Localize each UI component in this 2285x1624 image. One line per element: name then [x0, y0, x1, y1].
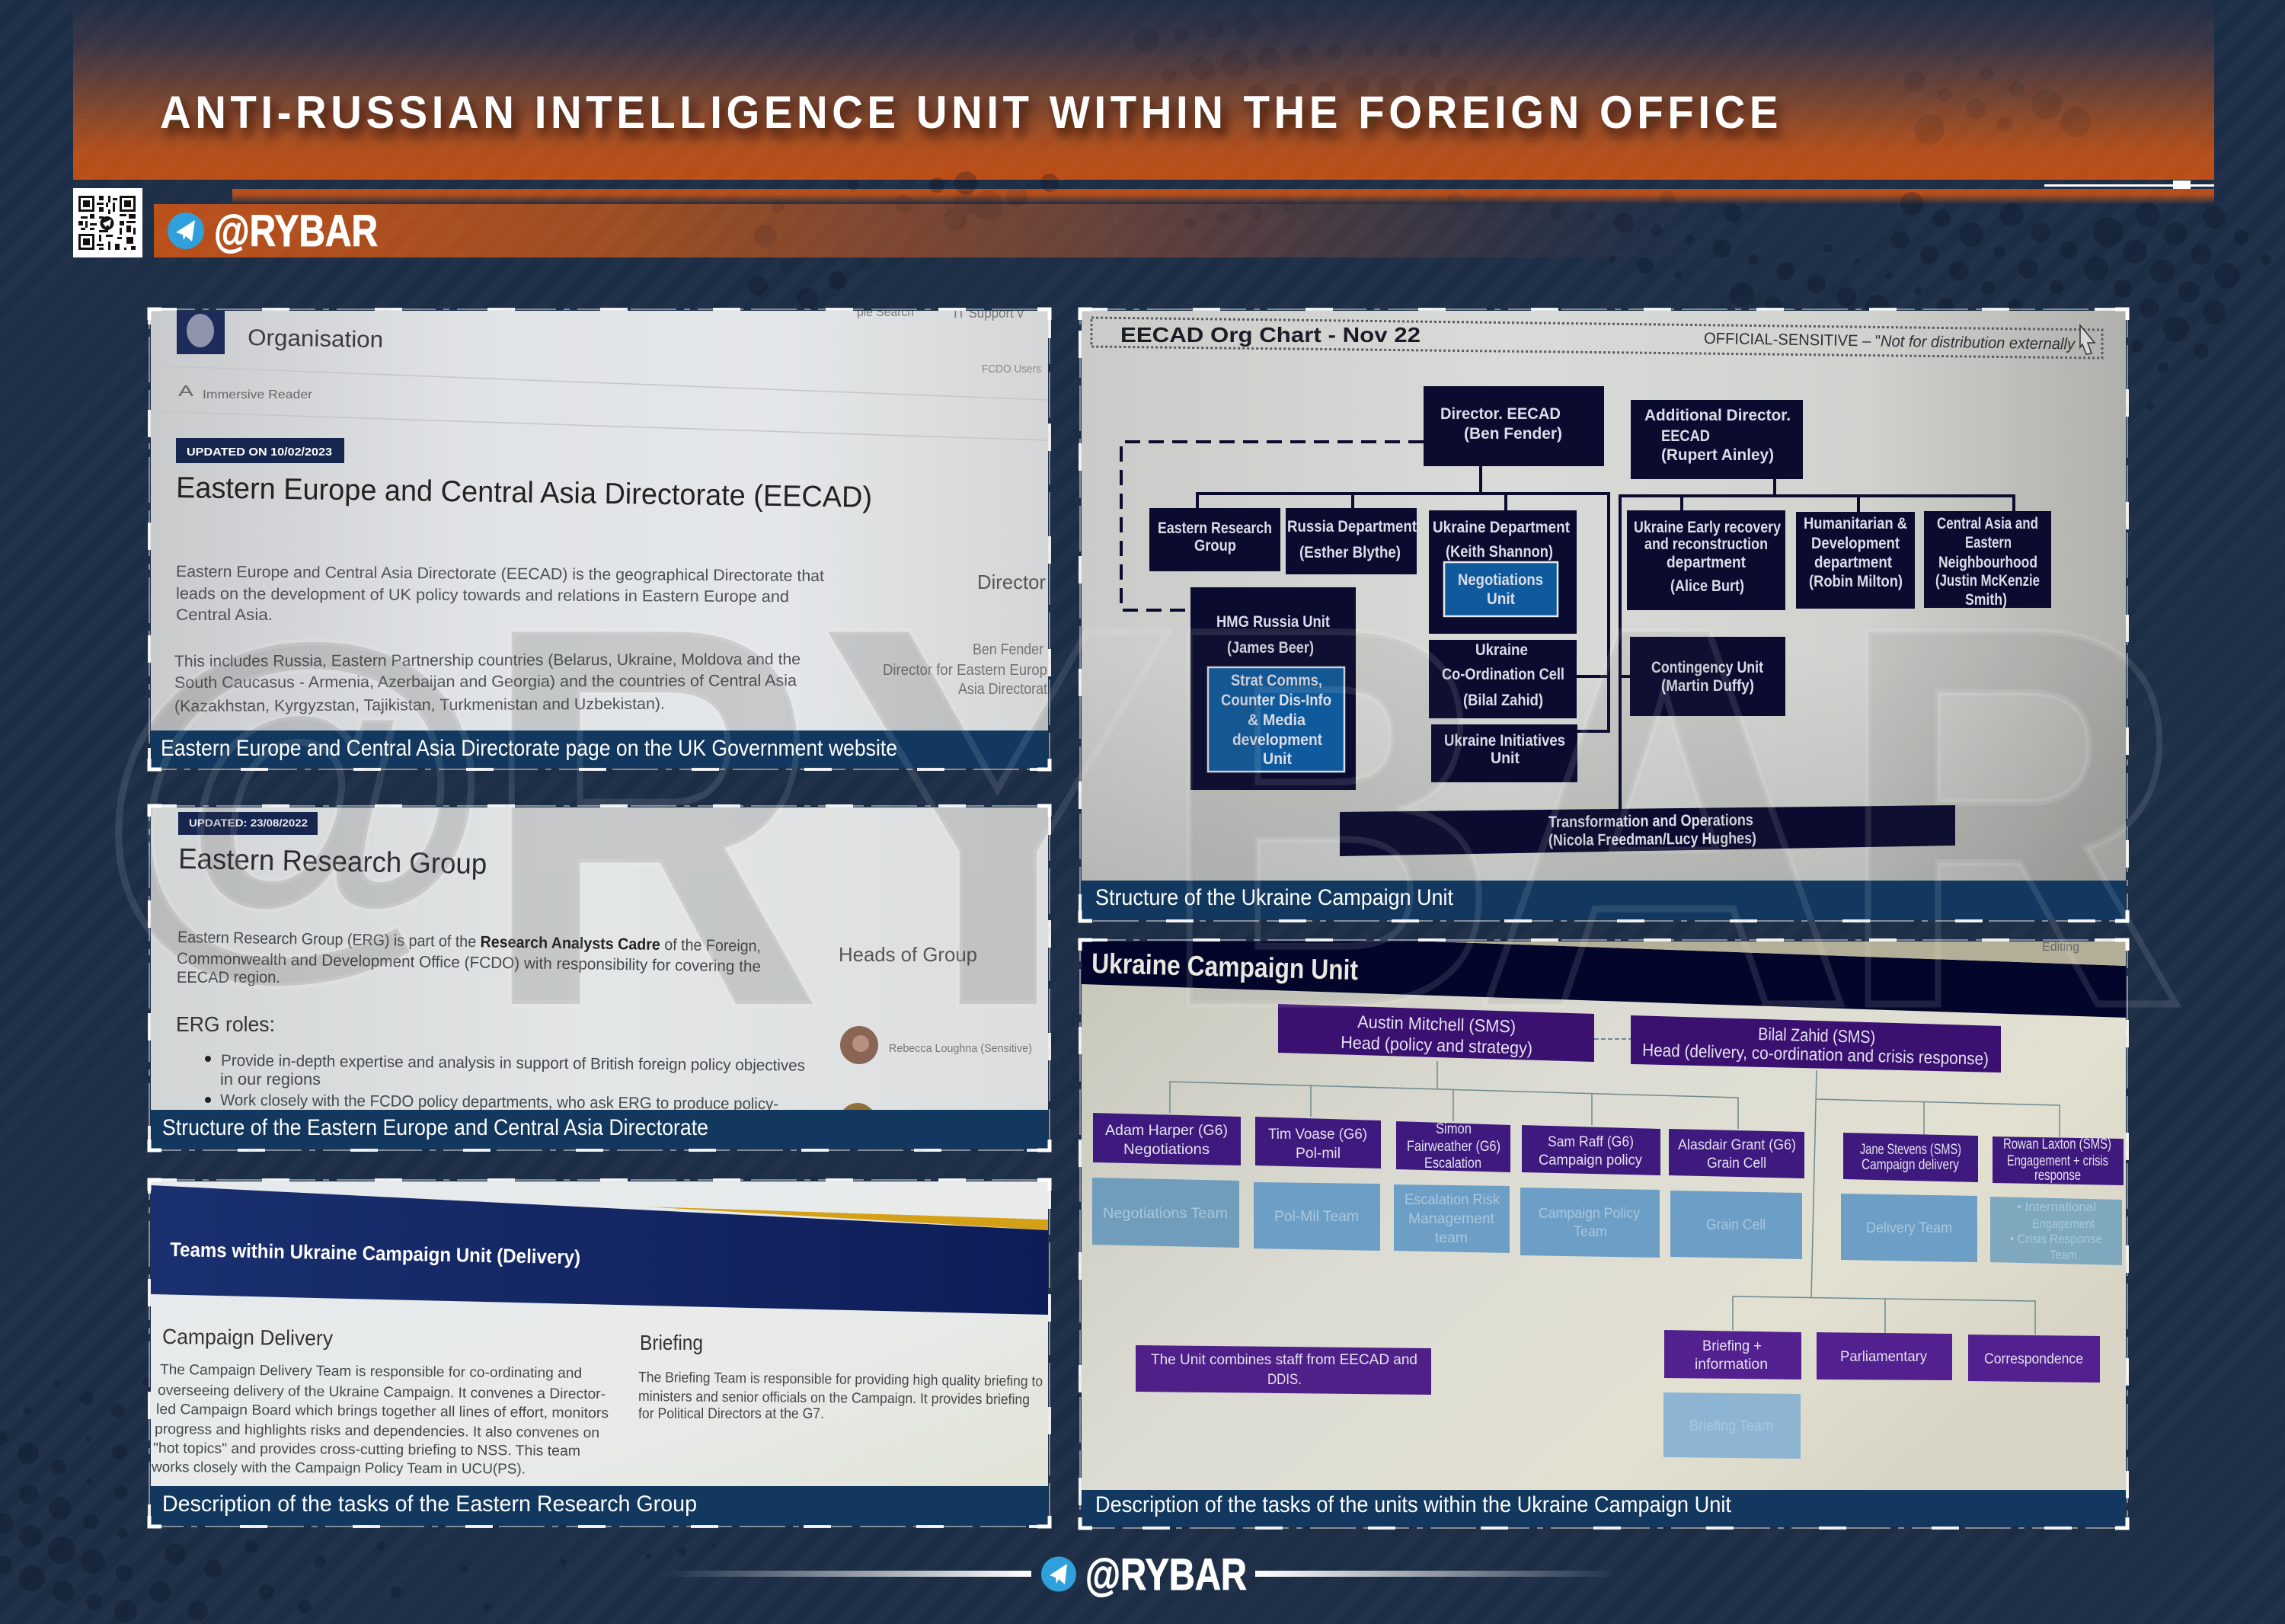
box: Strat Comms: Counter Dis-Info	[1221, 692, 1331, 709]
yellow sliver	[644, 1207, 1048, 1230]
box: Additional Director: Additional Director.	[1644, 407, 1791, 424]
Campaign Delivery text: progress and highlights risks and dependencies. It also convenes on	[155, 1421, 599, 1441]
watermark: A	[1474, 515, 1855, 1119]
description: Commonwealth and Development Office (FCDO) with responsibility for covering the	[177, 950, 761, 976]
immersive reader: Immersive Reader	[203, 388, 313, 401]
box: Ukraine Initiatives Unit: Unit	[1491, 750, 1520, 767]
box: Sam Raff: Sam Raff (G6)	[1548, 1134, 1634, 1150]
box: Tim Voase: Pol-mil	[1296, 1146, 1341, 1162]
Briefing heading: Briefing	[640, 1331, 703, 1354]
box: Humanitarian	[1796, 512, 1915, 609]
box: Jane Stevens: Jane Stevens (SMS)	[1860, 1142, 1961, 1158]
box: Ukraine Department: (Keith Shannon)	[1446, 543, 1553, 561]
box: Tim Voase: Tim Voase (G6)	[1268, 1127, 1367, 1143]
box: Bilal Zahid	[1631, 1015, 2001, 1073]
box: Ukraine Co-Ordination Cell: (Bilal Zahid)	[1463, 692, 1543, 709]
box: HMG Russia Unit	[1190, 587, 1356, 790]
update badge	[176, 438, 344, 463]
box: Jane Stevens	[1843, 1133, 1978, 1182]
Briefing text: The Briefing Team is responsible for providing high quality briefing to	[638, 1370, 1043, 1390]
box: Ukraine Early recovery: and reconstruction	[1644, 535, 1768, 553]
box: Transformation and Operations: (Nicola Freedman/Lucy Hughes)	[1548, 830, 1756, 849]
caption: Description of the tasks of the Eastern Research Group	[162, 1491, 697, 1517]
team: Escalation: team	[1435, 1230, 1468, 1246]
watermark: B	[1158, 515, 1500, 1119]
Briefing text: ministers and senior officials on the Campaign. It provides briefing	[638, 1389, 1030, 1408]
box: Correspondence	[1968, 1335, 2100, 1383]
watermark: A	[1474, 515, 1855, 1119]
team: Escalation: Management	[1408, 1211, 1495, 1227]
box: Eastern Research Group	[1149, 508, 1280, 571]
immersive reader	[178, 385, 312, 398]
box: Rowan Laxton	[1993, 1136, 2124, 1185]
team: Delivery	[1841, 1194, 1977, 1262]
box: Humanitarian: department	[1814, 554, 1892, 571]
Campaign Delivery text: overseeing delivery of the Ukraine Campaign. It convenes a Director-	[158, 1383, 606, 1402]
description text: Eastern Europe and Central Asia Directorate (EECAD) is the geographical Directorate that	[176, 563, 824, 585]
top handle logo: @RYBAR	[214, 206, 378, 256]
caption	[151, 730, 1048, 768]
update badge	[178, 812, 318, 835]
watermark: R	[1836, 515, 2186, 1119]
box: Transformation and Operations: Transformation and Operations	[1548, 811, 1753, 831]
watermark: R	[1836, 515, 2186, 1119]
Campaign Delivery text: led Campaign Board which brings together all lines of effort, monitors	[156, 1402, 609, 1421]
director column: Asia Directorat	[958, 681, 1047, 698]
description text: This includes Russia, Eastern Partnership countries (Belarus, Ukraine, Moldova and the	[174, 651, 801, 670]
avatar and name: Rebecca Loughna (Sensitive)	[889, 1042, 1032, 1055]
box: HMG Russia Unit: (James Beer)	[1227, 639, 1314, 657]
box: Ukraine Co-Ordination Cell	[1429, 640, 1577, 718]
heads of group: Heads of Group	[839, 943, 977, 966]
page heading: Organisation: Organisation	[248, 325, 383, 353]
box: Eastern Research Group: Group	[1194, 537, 1236, 555]
caption	[151, 1110, 1048, 1149]
box: Contingency Unit: Contingency Unit	[1651, 659, 1763, 676]
box: Rowan Laxton: Rowan Laxton (SMS)	[2003, 1136, 2111, 1152]
search hint: ple Search	[857, 305, 914, 319]
caption	[1082, 881, 2126, 919]
box: Ukraine Co-Ordination Cell: Co-Ordination Cell	[1442, 666, 1564, 683]
Campaign Delivery text: The Campaign Delivery Team is responsible for co-ordinating and	[160, 1362, 582, 1382]
box: Correspondence: Correspondence	[1984, 1351, 2083, 1367]
ERG roles heading: ERG roles:	[176, 1012, 275, 1036]
decorative slider line	[2044, 181, 2214, 189]
box: Strat Comms: development	[1232, 731, 1322, 749]
header underline bar	[232, 189, 2214, 204]
box: Austin Mitchell	[1278, 1004, 1594, 1062]
box: Jane Stevens: Campaign delivery	[1862, 1157, 1959, 1173]
Campaign Delivery text: "hot topics" and provides cross-cutting briefing to NSS. This team	[153, 1440, 580, 1459]
box: Russia Department: (Esther Blythe)	[1299, 544, 1401, 561]
box: Central Asia: Central Asia and	[1937, 515, 2038, 532]
team: Campaign Policy: Team	[1574, 1224, 1607, 1240]
box: Director: Director. EECAD	[1440, 405, 1561, 423]
caption: Structure of the Eastern Europe and Central Asia Directorate	[162, 1115, 708, 1140]
editing label: Editing	[2042, 941, 2079, 954]
connector lines	[1121, 442, 2014, 809]
box: HMG Russia Unit: HMG Russia Unit	[1216, 613, 1330, 631]
team: Grain Cell: Grain Cell	[1706, 1217, 1766, 1233]
box: Central Asia	[1924, 511, 2051, 609]
box: Humanitarian: Humanitarian &	[1804, 515, 1907, 532]
description text: (Kazakhstan, Kyrgyzstan, Tajikistan, Turkmenistan and Uzbekistan).	[174, 695, 665, 715]
description text: Central Asia.	[176, 606, 273, 624]
Campaign Delivery heading: Campaign Delivery	[162, 1325, 333, 1350]
caption: Description of the tasks of the units within the Ukraine Campaign Unit	[1095, 1492, 1732, 1517]
team: International Engagement: Team	[2050, 1248, 2077, 1262]
box: Contingency Unit: (Martin Duffy)	[1661, 677, 1754, 695]
box: Adam Harper: Adam Harper (G6)	[1105, 1123, 1228, 1139]
team: Pol-Mil	[1254, 1182, 1380, 1251]
note: unit composition	[1136, 1345, 1431, 1395]
box: Briefing + information: Briefing +	[1702, 1338, 1762, 1354]
Campaign Delivery text	[151, 1362, 609, 1478]
box: Adam Harper	[1093, 1113, 1241, 1165]
description	[177, 929, 761, 986]
classification note: OFFICIAL-SENSITIVE – "Not for distribution externally	[1704, 330, 2076, 353]
box: Rowan Laxton: response	[2034, 1168, 2081, 1184]
director column: Director for Eastern Europ	[883, 662, 1047, 679]
ERG roles bullets: in our regions	[220, 1071, 321, 1089]
box: Briefing + information	[1664, 1330, 1801, 1379]
box: Additional Director: (Rupert Ainley)	[1661, 446, 1774, 464]
box: Director: (Ben Fender)	[1464, 425, 1562, 443]
team: Grain Cell	[1670, 1191, 1802, 1259]
team: International Engagement: Engagement	[2032, 1216, 2095, 1231]
box: Parliamentary	[1817, 1332, 1952, 1380]
ERG roles bullets: Work closely with the FCDO policy departments, who ask ERG to produce policy-	[220, 1092, 778, 1113]
immersive reader: A	[178, 383, 194, 400]
Campaign Delivery text: works closely with the Campaign Policy Team in UCU(PS).	[151, 1459, 526, 1478]
box: Simon Fairweather: Escalation	[1424, 1156, 1481, 1172]
box: Central Asia: Eastern	[1965, 534, 2012, 551]
box: Austin Mitchell: Head (policy and strategy)	[1341, 1032, 1533, 1058]
update badge: UPDATED: 23/08/2022	[189, 817, 308, 829]
navy band	[151, 1185, 1048, 1315]
box: Adam Harper: Negotiations	[1123, 1142, 1210, 1158]
Briefing text: for Political Directors at the G7.	[638, 1406, 824, 1422]
top screen strip	[1411, 941, 2126, 966]
title: ANTI-RUSSIAN INTELLIGENCE UNIT WITHIN THE FOREIGN OFFICE	[160, 87, 1782, 138]
team: Negotiations	[1092, 1178, 1239, 1248]
ERG roles bullets	[205, 1052, 805, 1113]
box: Central Asia: Smith)	[1965, 591, 2007, 609]
watermark: B	[1158, 515, 1500, 1119]
box: Contingency Unit	[1630, 637, 1785, 716]
team: International Engagement: • Crisis Response	[2010, 1232, 2102, 1246]
box: Simon Fairweather: Fairweather (G6)	[1407, 1139, 1500, 1155]
top handle logo	[168, 206, 378, 256]
footer logo: @RYBAR	[1085, 1550, 1247, 1600]
box: Strat Comms: Unit	[1263, 750, 1292, 768]
caption	[1082, 1490, 2126, 1526]
band title: Ukraine Campaign Unit	[1091, 948, 1359, 986]
box: Strat Comms	[1208, 667, 1344, 772]
header banner	[73, 0, 2214, 180]
team: Briefing: Briefing Team	[1689, 1418, 1773, 1434]
box: Briefing + information: information	[1695, 1357, 1768, 1373]
box: Central Asia: (Justin McKenzie	[1935, 572, 2040, 590]
team: Escalation: Escalation Risk	[1405, 1192, 1500, 1208]
box: Director	[1424, 386, 1604, 466]
band title: Teams within Ukraine Campaign Unit (Delivery)	[170, 1238, 580, 1268]
page title: Eastern Research Group	[178, 843, 487, 881]
caption: Structure of the Ukraine Campaign Unit	[1095, 885, 1454, 910]
team: Escalation	[1394, 1184, 1510, 1253]
description: Eastern Research Group (ERG) is part of the Research Analysts Cadre of the Foreign,	[177, 929, 761, 955]
director column: Director	[977, 571, 1046, 593]
watermark: R	[480, 515, 823, 1119]
watermark: @	[95, 565, 495, 1008]
box: Alasdair Grant: Alasdair Grant (G6)	[1678, 1137, 1796, 1153]
box: Austin Mitchell: Austin Mitchell (SMS)	[1357, 1012, 1516, 1037]
description text	[174, 563, 824, 715]
director column: Ben Fender	[973, 641, 1043, 658]
box: Simon Fairweather	[1396, 1121, 1510, 1172]
box: Parliamentary: Parliamentary	[1840, 1349, 1927, 1365]
IT support: IT Support v	[954, 305, 1024, 321]
box: Tim Voase	[1255, 1117, 1381, 1168]
handle strip	[154, 204, 1723, 257]
icon: mouse cursor	[2080, 325, 2095, 354]
box: Ukraine Department: Ukraine Department	[1433, 519, 1570, 536]
icon: crest	[177, 308, 225, 354]
org chart title: EECAD Org Chart - Nov 22	[1120, 323, 1421, 347]
team: Negotiations: Negotiations Team	[1103, 1206, 1228, 1222]
box: Strat Comms: & Media	[1248, 711, 1305, 729]
box: Humanitarian: Development	[1811, 535, 1900, 552]
box: Ukraine Co-Ordination Cell: Ukraine	[1475, 641, 1528, 659]
update badge: UPDATED ON 10/02/2023	[187, 446, 332, 459]
note: unit composition: DDIS.	[1267, 1372, 1302, 1388]
page title: Eastern Europe and Central Asia Directorate (EECAD)	[176, 472, 872, 514]
description text: South Caucasus - Armenia, Azerbaijan and Georgia) and the countries of Central Asia	[174, 672, 797, 692]
second avatar	[839, 1103, 876, 1140]
QR code	[73, 188, 142, 257]
box: Sam Raff	[1522, 1125, 1660, 1175]
team: International Engagement	[1990, 1197, 2122, 1265]
team: International Engagement: • International	[2017, 1200, 2096, 1214]
box: Alasdair Grant: Grain Cell	[1707, 1156, 1766, 1172]
panel: Eastern Research Group page	[149, 806, 1050, 1150]
director column	[883, 571, 1047, 698]
description: EECAD region.	[177, 969, 280, 986]
box: Russia Department	[1286, 508, 1417, 574]
FCDO users: FCDO Users	[982, 363, 1041, 376]
box: Additional Director	[1631, 400, 1803, 479]
team: Campaign Policy	[1520, 1188, 1660, 1258]
box: Humanitarian: (Robin Milton)	[1809, 573, 1903, 590]
Briefing text	[638, 1370, 1043, 1422]
box: Sam Raff: Campaign policy	[1539, 1152, 1642, 1168]
box: Ukraine Early recovery	[1627, 510, 1785, 610]
box: Bilal Zahid: Bilal Zahid (SMS)	[1758, 1024, 1876, 1047]
box: Alasdair Grant	[1669, 1129, 1804, 1178]
box: Ukraine Initiatives Unit	[1431, 724, 1577, 782]
watermark	[95, 515, 2186, 1119]
dark header band	[1082, 941, 2126, 1018]
connector lines	[1170, 1039, 2060, 1335]
panel: EECAD org chart	[1080, 309, 2127, 921]
caption: Eastern Europe and Central Asia Directorate page on the UK Government website	[161, 736, 897, 761]
watermark: Y	[819, 515, 1177, 1119]
panel: Ukraine Campaign Unit chart	[1080, 940, 2127, 1528]
description text: leads on the development of UK policy towards and relations in Eastern Europe and	[176, 585, 789, 606]
box: Rowan Laxton: Engagement + crisis	[2007, 1153, 2108, 1169]
ERG roles bullets: Provide in-depth expertise and analysis in support of British foreign policy objectives	[221, 1052, 805, 1075]
box: Ukraine Early recovery: (Alice Burt)	[1670, 577, 1744, 595]
box: Negotiations Unit: Unit	[1487, 590, 1515, 608]
box: Russia Department: Russia Department	[1287, 518, 1417, 535]
watermark: R	[480, 515, 823, 1119]
team: Delivery: Delivery Team	[1866, 1220, 1952, 1236]
panel: Teams within Ukraine Campaign Unit page	[149, 1180, 1050, 1526]
box: Strat Comms: Strat Comms,	[1231, 672, 1322, 689]
team: Pol-Mil: Pol-Mil Team	[1274, 1209, 1359, 1225]
box: Bilal Zahid: Head (delivery, co-ordination and crisis response)	[1642, 1040, 1989, 1069]
box: Ukraine Early recovery: department	[1667, 554, 1746, 571]
box: Negotiations Unit: Negotiations	[1458, 571, 1543, 589]
footer logo	[663, 1550, 1619, 1600]
box: Ukraine Initiatives Unit: Ukraine Initiatives	[1444, 732, 1565, 750]
box: Additional Director: EECAD	[1661, 427, 1710, 445]
box: Transformation and Operations	[1340, 805, 1955, 856]
caption	[151, 1486, 1048, 1525]
box: Negotiations Unit	[1444, 562, 1558, 616]
box: Eastern Research Group: Eastern Research	[1158, 519, 1272, 537]
panel: EECAD UK Government page	[149, 305, 1050, 769]
box: Simon Fairweather: Simon	[1436, 1121, 1472, 1137]
note: unit composition: The Unit combines staff from EECAD and	[1151, 1352, 1417, 1368]
watermark: Y	[819, 515, 1177, 1119]
watermark: @	[95, 565, 495, 1008]
avatar and name	[840, 1026, 1032, 1064]
box: Central Asia: Neighbourhood	[1938, 554, 2037, 571]
box: Ukraine Early recovery: Ukraine Early recovery	[1634, 519, 1781, 536]
box: Ukraine Department	[1429, 510, 1577, 634]
dotted header frame	[1091, 318, 2102, 358]
team: Campaign Policy: Campaign Policy	[1539, 1206, 1640, 1222]
team: Briefing	[1663, 1392, 1801, 1459]
